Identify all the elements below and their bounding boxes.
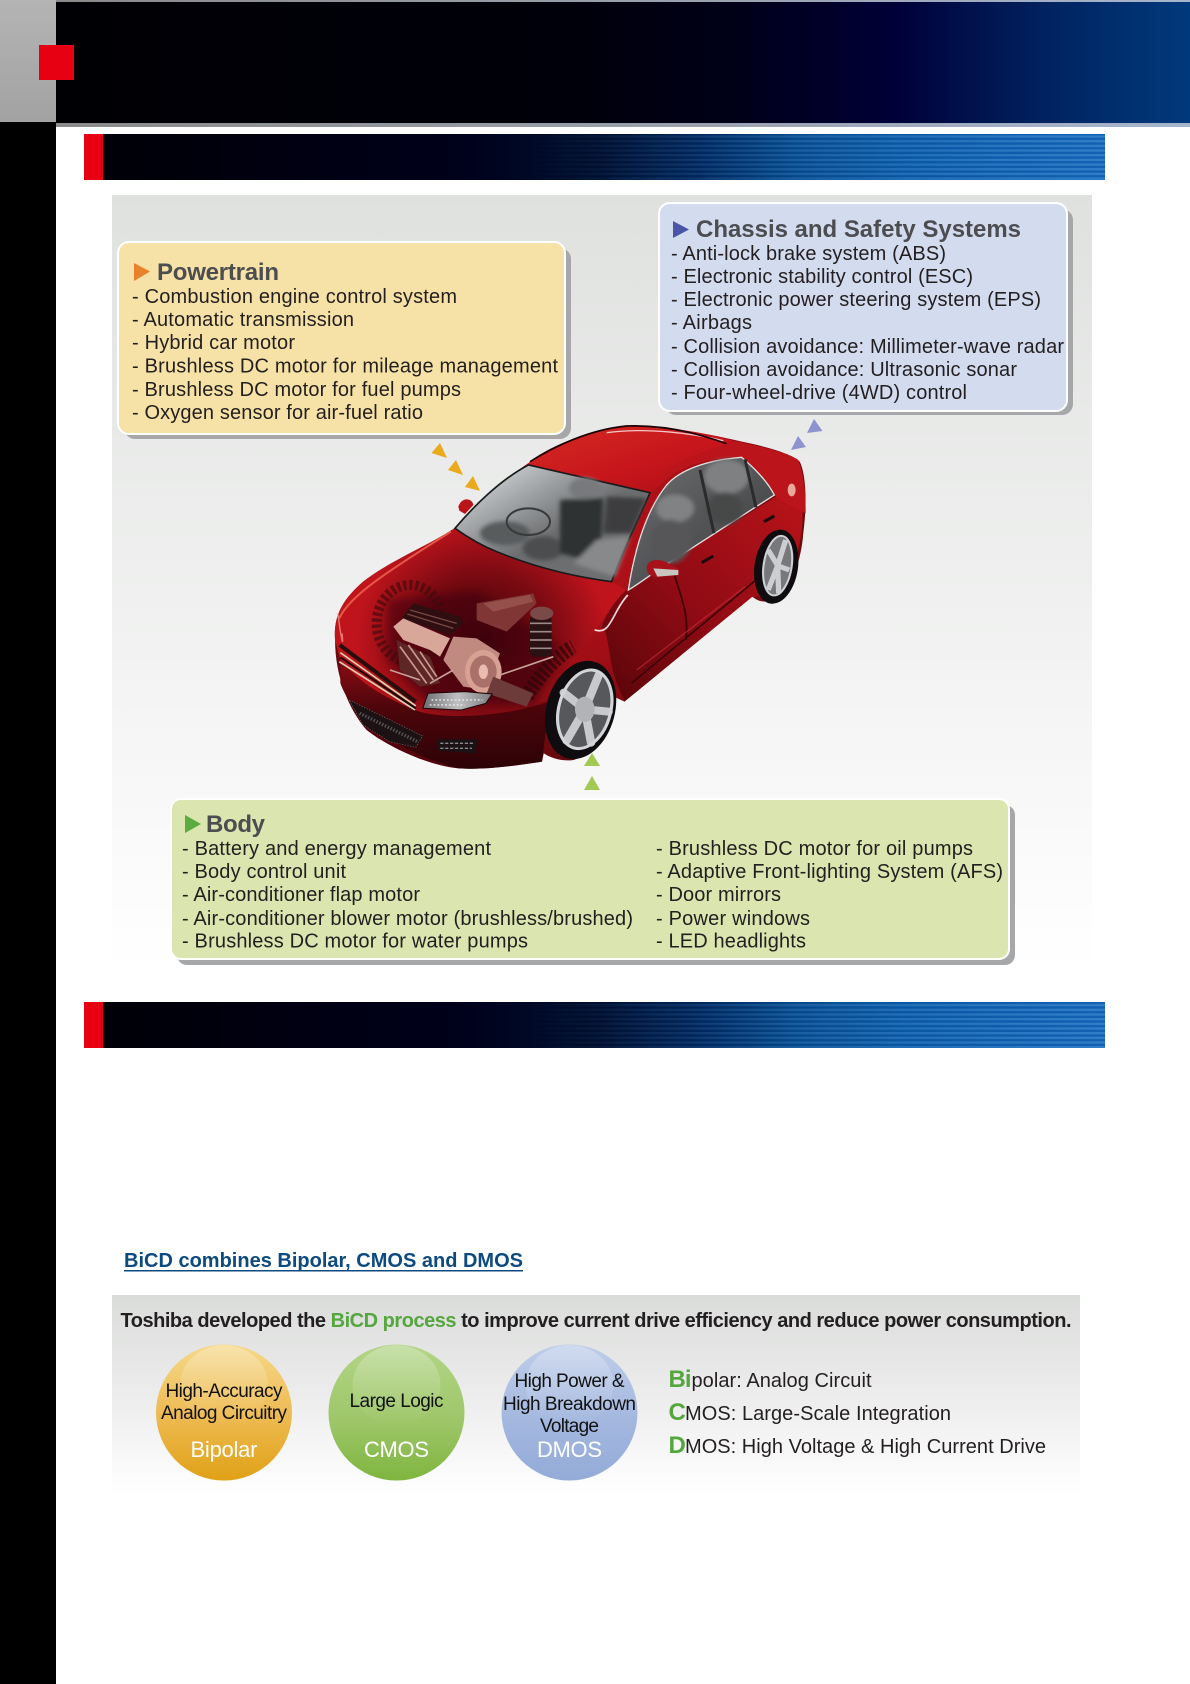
headlight xyxy=(423,692,492,710)
left mirror xyxy=(458,499,473,514)
panel: chassis and safety systems: - Collision avoidance: Ultrasonic sonar xyxy=(671,359,1017,381)
panel: powertrain: Powertrain xyxy=(157,259,279,286)
legend: process definitions: Bi xyxy=(668,1366,692,1393)
legend: process definitions: MOS: Large-Scale Integration xyxy=(685,1403,951,1425)
panel: body: - Air-conditioner flap motor xyxy=(182,884,420,906)
circle: Bipolar: High-Accuracy xyxy=(166,1381,283,1402)
circle: DMOS xyxy=(502,1344,638,1480)
mirror xyxy=(647,560,678,577)
rear wheel xyxy=(749,527,803,606)
panel: body: - Adaptive Front-lighting System (AFS) xyxy=(656,861,1003,883)
panel: body: - Battery and energy management xyxy=(182,838,491,860)
front end details xyxy=(339,527,803,766)
circle: DMOS: DMOS xyxy=(537,1437,602,1462)
front seats xyxy=(480,478,647,577)
panel: chassis and safety systems: - Electronic stability control (ESC) xyxy=(671,266,973,288)
illustration: red car with visible engine xyxy=(335,426,806,769)
panel: chassis and safety systems: Chassis and Safety Systems xyxy=(696,216,1021,243)
rear deck xyxy=(651,441,806,513)
panel: powertrain xyxy=(118,242,571,439)
panel: powertrain: - Combustion engine control system xyxy=(132,286,457,308)
circle: Bipolar xyxy=(156,1344,292,1480)
panel: powertrain: - Brushless DC motor for mileage management xyxy=(132,356,558,378)
panel: body: - LED headlights xyxy=(656,930,806,952)
circle: CMOS: Large Logic xyxy=(350,1391,444,1412)
pillars xyxy=(700,459,756,533)
circle: Bipolar: Bipolar xyxy=(190,1437,258,1462)
section bar one xyxy=(84,134,1105,180)
circle: DMOS: Voltage xyxy=(540,1416,599,1437)
circle: DMOS: High Breakdown xyxy=(503,1394,636,1415)
roof highlight xyxy=(607,431,723,441)
panel: chassis and safety systems: - Four-wheel-drive (4WD) control xyxy=(671,382,967,404)
panel: chassis and safety systems xyxy=(659,203,1073,415)
car lower body xyxy=(335,427,806,769)
top header banner xyxy=(0,0,1190,127)
legend: process definitions: polar: Analog Circuit xyxy=(692,1370,872,1392)
steering wheel xyxy=(507,508,550,535)
circle: Bipolar: Analog Circuitry xyxy=(161,1403,288,1424)
legend: process definitions xyxy=(668,1366,1046,1459)
circle: DMOS: High Power & xyxy=(514,1371,625,1392)
panel: chassis and safety systems: - Anti-lock brake system (ABS) xyxy=(671,243,946,265)
grille xyxy=(339,645,416,710)
engine see-through xyxy=(377,585,573,707)
legend: process definitions: C xyxy=(668,1399,686,1426)
lower air intake xyxy=(349,700,423,747)
arrows: green pointers to body xyxy=(584,753,600,790)
panel: body: - Brushless DC motor for water pumps xyxy=(182,930,528,952)
panel: powertrain: - Brushless DC motor for fuel pumps xyxy=(132,379,461,401)
sentence: Toshiba developed the BiCD process to improve current drive efficiency and reduce power consumption. xyxy=(120,1310,1072,1332)
car cabin xyxy=(455,426,806,590)
panel: chassis and safety systems: - Collision avoidance: Millimeter-wave radar xyxy=(671,336,1064,358)
roof xyxy=(528,426,733,493)
circle: CMOS: CMOS xyxy=(364,1437,429,1462)
arrows: orange pointers to powertrain xyxy=(432,443,480,491)
rear lamp xyxy=(788,484,796,496)
front wheel xyxy=(534,654,627,766)
left black sidebar xyxy=(0,0,56,1684)
side window seats xyxy=(649,459,749,564)
panel: BiCD process xyxy=(112,1295,1080,1495)
arrows: blue pointers to chassis xyxy=(791,419,822,450)
panel: powertrain: - Hybrid car motor xyxy=(132,332,295,354)
section bar two xyxy=(84,1002,1105,1048)
panel: body: - Door mirrors xyxy=(656,884,781,906)
panel: automotive applications xyxy=(112,195,1092,967)
panel: chassis and safety systems: - Electronic power steering system (EPS) xyxy=(671,289,1041,311)
panel: body: - Body control unit xyxy=(182,861,346,883)
fog lamp xyxy=(437,739,478,753)
panel: body: - Power windows xyxy=(656,908,810,930)
panel: body: - Brushless DC motor for oil pumps xyxy=(656,838,973,860)
panel: powertrain: - Oxygen sensor for air-fuel ratio xyxy=(132,402,423,424)
panel: chassis and safety systems: - Airbags xyxy=(671,312,752,334)
windshield xyxy=(455,465,650,582)
legend: process definitions: MOS: High Voltage & High Current Drive xyxy=(685,1436,1046,1458)
panel: body xyxy=(171,799,1015,965)
panel: powertrain: - Automatic transmission xyxy=(132,309,354,331)
panel: body: - Air-conditioner blower motor (brushless/brushed) xyxy=(182,908,633,930)
panel: body: Body xyxy=(206,811,266,838)
door handles xyxy=(702,516,774,563)
circle: CMOS xyxy=(328,1344,464,1480)
heading: BiCD combines: BiCD combines Bipolar, CMOS and DMOS xyxy=(124,1250,523,1272)
roof edge xyxy=(530,426,775,463)
side windows xyxy=(628,457,774,590)
legend: process definitions: D xyxy=(668,1432,686,1459)
